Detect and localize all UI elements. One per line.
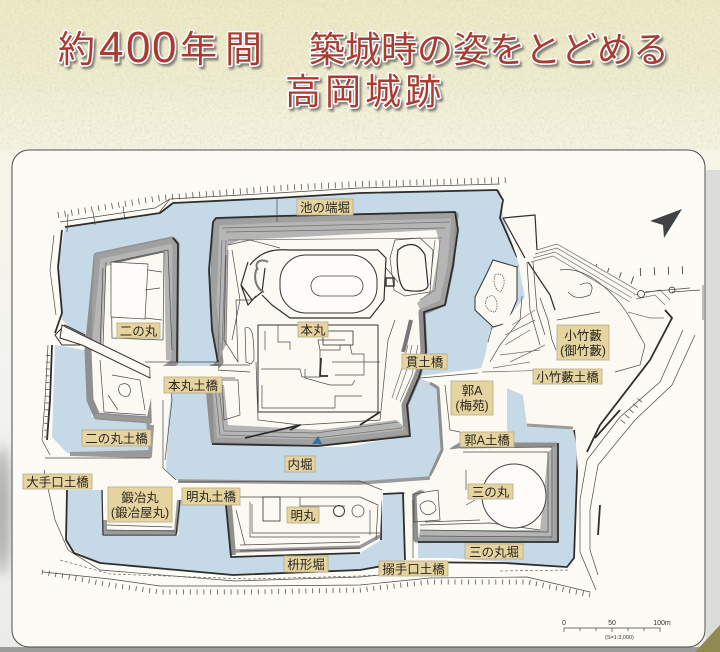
label: 大手口土橋: 大手口土橋 bbox=[26, 476, 89, 490]
map: sannomaru island bbox=[381, 443, 558, 560]
label: 貫土橋: 貫土橋 bbox=[406, 356, 444, 370]
map: pond island bbox=[475, 258, 526, 342]
scale bar bbox=[562, 620, 671, 641]
scale bar: 0 bbox=[562, 620, 566, 627]
map: northern perimeter and houses bbox=[42, 180, 688, 595]
label: 郭A(梅苑): 郭A bbox=[462, 384, 483, 398]
scale bar: 100m bbox=[653, 620, 671, 627]
title: 4 bbox=[99, 23, 123, 72]
title: 約 bbox=[58, 29, 95, 70]
icon: north arrow bbox=[650, 209, 682, 238]
label: 小竹藪(御竹藪): 小竹藪 bbox=[564, 329, 602, 343]
label: 二の丸: 二の丸 bbox=[120, 324, 158, 338]
label: 二の丸土橋: 二の丸土橋 bbox=[85, 432, 148, 446]
map: kajimaru island bbox=[102, 480, 180, 535]
scale bar: 50 bbox=[608, 620, 616, 627]
palace compound bbox=[258, 325, 378, 412]
east garden bbox=[397, 245, 428, 291]
label: 郭A土橋: 郭A土橋 bbox=[464, 434, 510, 448]
label: 小竹藪(御竹藪): (御竹藪) bbox=[560, 343, 606, 358]
label: 小竹藪(御竹藪) bbox=[557, 325, 609, 360]
map: honmaru island bbox=[208, 212, 458, 446]
label: 郭A(梅苑): (梅苑) bbox=[455, 399, 489, 413]
label: 明丸 bbox=[287, 507, 319, 523]
title bbox=[58, 23, 669, 112]
label: 枡形堀: 枡形堀 bbox=[287, 557, 325, 572]
label: 鍛冶丸(鍛冶屋丸) bbox=[108, 487, 172, 522]
map: ninomaru island bbox=[70, 238, 178, 454]
map: kuruwa A bbox=[420, 373, 512, 476]
title: 0 bbox=[126, 23, 150, 72]
map: meimaru island bbox=[177, 478, 430, 557]
map: land bridge and roads bbox=[42, 230, 578, 581]
title: 0 bbox=[152, 23, 176, 72]
scale bar: (S=1:3,000) bbox=[605, 635, 634, 641]
label: 池の端堀: 池の端堀 bbox=[300, 200, 350, 215]
map: kochikuyabu grounds bbox=[478, 215, 703, 590]
panel: map card bbox=[12, 150, 705, 647]
title: 年 bbox=[180, 29, 217, 70]
label: 郭A(梅苑) bbox=[451, 381, 493, 415]
label: 鍛冶丸(鍛冶屋丸): (鍛冶屋丸) bbox=[111, 506, 169, 520]
title: 間 bbox=[225, 29, 262, 70]
labels bbox=[23, 199, 609, 576]
plaza oval bbox=[280, 255, 377, 313]
label: 小竹藪土橋: 小竹藪土橋 bbox=[536, 370, 599, 384]
label: 三の丸: 三の丸 bbox=[472, 486, 510, 500]
label: 明丸: 明丸 bbox=[290, 509, 316, 523]
label: 内堀: 内堀 bbox=[287, 457, 313, 472]
label: 三の丸堀: 三の丸堀 bbox=[469, 544, 519, 560]
title: 高岡城跡 bbox=[285, 71, 445, 112]
label: 搦手口土橋: 搦手口土橋 bbox=[382, 562, 445, 576]
label: 本丸土橋: 本丸土橋 bbox=[168, 379, 218, 393]
label: 明丸土橋: 明丸土橋 bbox=[186, 490, 236, 504]
label: 鍛冶丸(鍛冶屋丸): 鍛冶丸 bbox=[121, 491, 159, 505]
label: 本丸: 本丸 bbox=[300, 324, 326, 338]
map: castle moats bbox=[52, 190, 577, 575]
title: 築城時の姿をとどめる bbox=[309, 29, 669, 70]
